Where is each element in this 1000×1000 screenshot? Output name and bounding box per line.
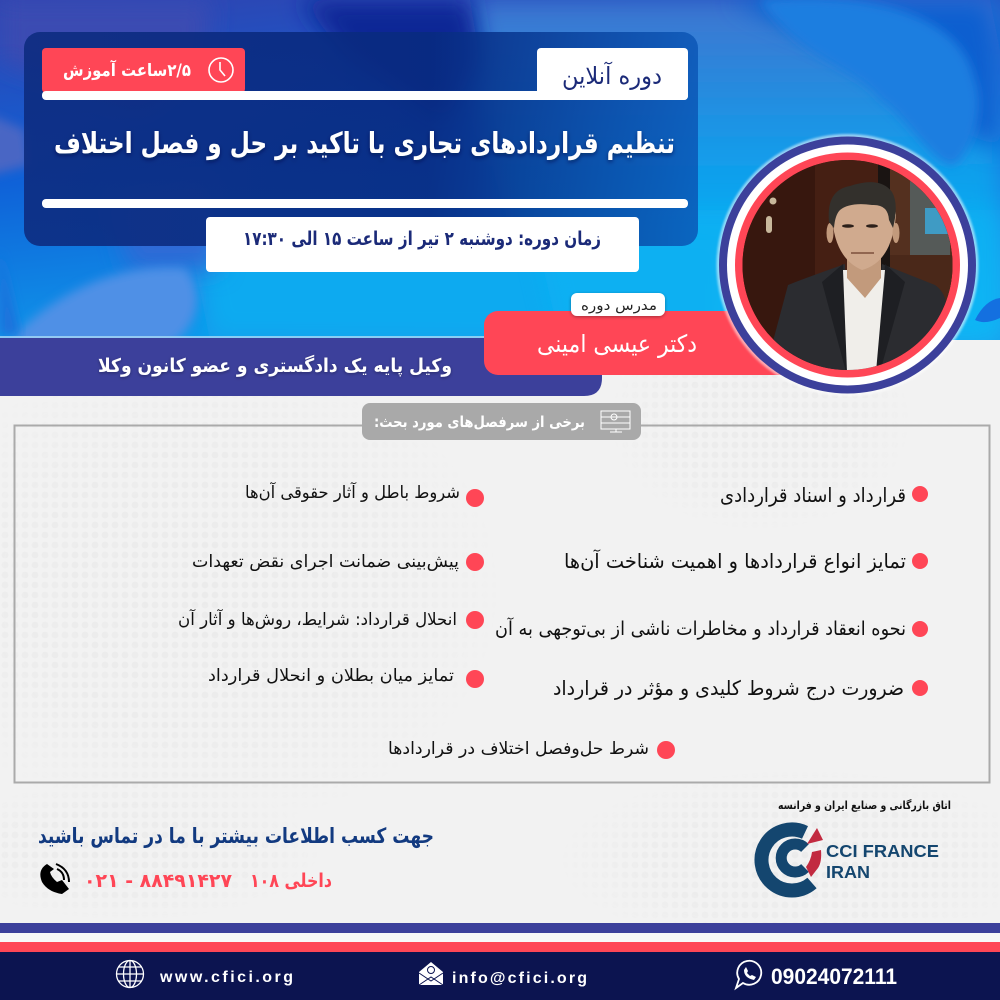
topic 5: شروط باطل و آثار حقوقی آن‌ها (245, 481, 460, 503)
topic 7: انحلال قرارداد: شرایط، روش‌ها و آثار آن (178, 608, 457, 630)
topic 1: قرارداد و اسناد قراردادی (720, 483, 906, 507)
badge: online course: دوره آنلاین (562, 61, 662, 90)
heading pill (362, 403, 641, 440)
topic 6: پیش‌بینی ضمانت اجرای نقض تعهدات (192, 552, 459, 572)
neck and face (847, 258, 881, 298)
website: www.cfici.org (159, 969, 293, 986)
panel backdrop (24, 32, 698, 246)
topic 3: نحوه انعقاد قرارداد و مخاطرات ناشی از بی‌توجهی به آن (495, 616, 906, 640)
phone number: 09024072111 (771, 964, 897, 989)
logo: CCI France Iran: CCI FRANCE (826, 841, 939, 861)
badge: duration: ۲/۵ساعت آموزش (63, 59, 191, 81)
shirt (843, 270, 885, 372)
contact phone: ۰۲۱ - ۸۸۴۹۱۴۲۷ (84, 870, 232, 892)
band: instructor credentials (0, 336, 602, 396)
band: instructor credentials: وکیل پایه یک دادگستری و عضو کانون وکلا (98, 354, 452, 377)
topic 8: تمایز میان بطلان و انحلال قرارداد (208, 666, 454, 686)
icon: monitor (601, 411, 630, 432)
footer bar (0, 952, 1000, 1000)
date box (206, 217, 639, 272)
contact heading: جهت کسب اطلاعات بیشتر با ما در تماس باشید (38, 824, 434, 848)
icon: email (419, 962, 443, 985)
panel: course title (24, 32, 698, 246)
topic 9: شرط حل‌وفصل اختلاف در قراردادها (388, 739, 649, 759)
badge: duration (42, 48, 245, 93)
label: course instructor: مدرس دوره (581, 298, 657, 314)
contact phone (40, 864, 332, 894)
email address: info@cfici.org (452, 970, 587, 987)
icon: whatsapp (736, 961, 761, 988)
badge: online course (537, 48, 688, 100)
panel: instructor name (484, 311, 804, 375)
title: تنظیم قراردادهای تجاری با تاکید بر حل و فصل اختلاف (54, 126, 675, 160)
icon: clock (209, 58, 233, 82)
date box: زمان دوره: دوشنبه ۲ تیر از ساعت ۱۵ الی ۱۷:۳۰ (243, 228, 601, 250)
icon: phone (40, 864, 69, 894)
contact phone: داخلی ۱۰۸ (250, 870, 332, 892)
topic 2: تمایز انواع قراردادها و اهمیت شناخت آن‌ها (564, 548, 906, 573)
panel: instructor name: دکتر عیسی امینی (537, 330, 697, 358)
label: course instructor (571, 293, 665, 316)
icon: globe (116, 960, 144, 988)
suit (772, 264, 848, 375)
panel: syllabus (14, 403, 990, 782)
logo: CCI France Iran (761, 799, 951, 890)
heading pill: برخی از سرفصل‌های مورد بحث: (374, 413, 585, 431)
topic 4: ضرورت درج شروط کلیدی و مؤثر در قرارداد (553, 676, 904, 700)
logo: CCI France Iran: IRAN (826, 862, 870, 882)
footer stripes (0, 923, 1000, 952)
instructor portrait (716, 134, 978, 396)
logo: CCI France Iran: اتاق بازرگانی و صنایع ایران و فرانسه (778, 799, 951, 812)
hero photo background (0, 0, 1000, 345)
